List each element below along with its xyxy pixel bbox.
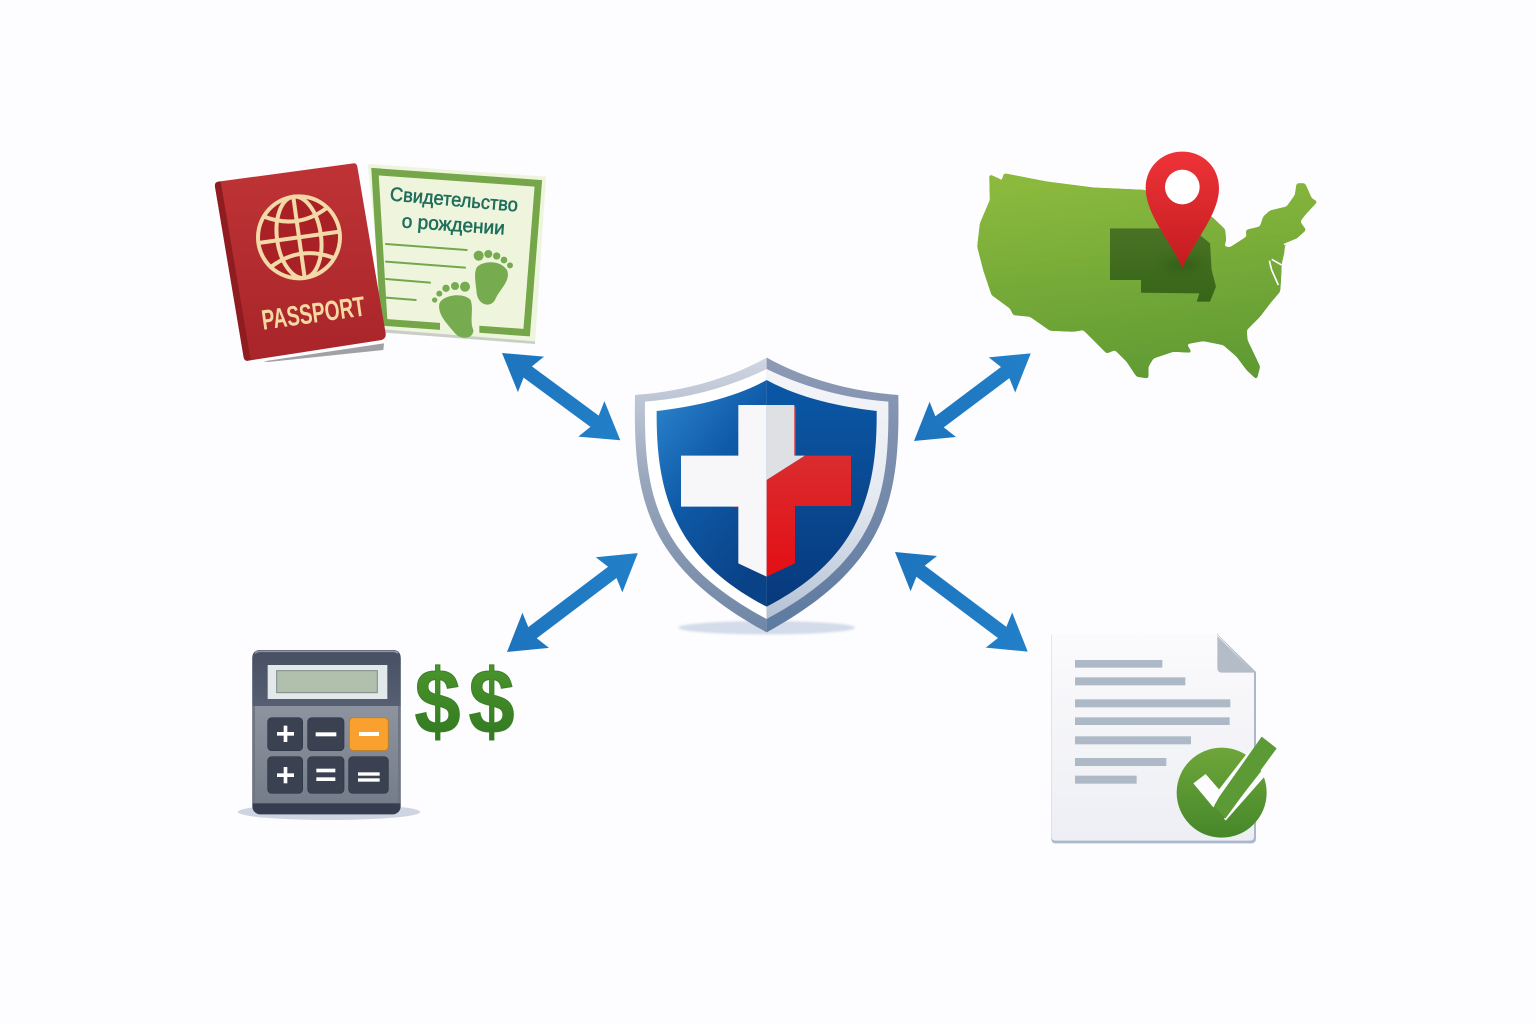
icon: right footprint: [474, 250, 513, 305]
icon: calculator: [238, 650, 420, 820]
certificate text lines: [386, 244, 467, 300]
icon: globe: [253, 191, 345, 284]
arrow: map to shield: [901, 336, 1044, 459]
medical cross: [681, 405, 851, 577]
calculator display: [268, 665, 387, 699]
icon: document with check mark: [1051, 634, 1277, 843]
arrow: passport to shield: [489, 335, 633, 458]
US map: [977, 173, 1317, 379]
page fold: [1217, 636, 1254, 673]
icon: passport: [215, 163, 386, 362]
icon: medical shield: [635, 358, 898, 634]
icon: US map with location pin: [977, 152, 1317, 379]
arrow: calculator to shield: [494, 536, 651, 670]
icon: left footprint: [432, 282, 473, 338]
certificate title: Свидетельство: [389, 184, 519, 217]
document text lines: [1075, 660, 1230, 784]
check badge: [1177, 737, 1277, 838]
location pin: [1146, 152, 1219, 268]
highlighted state: [1110, 228, 1216, 302]
icon: dollar signs: $$: [414, 650, 522, 753]
icon: birth certificate: [368, 164, 546, 344]
certificate subtitle: о рождении: [401, 211, 506, 240]
arrow: document to shield: [882, 534, 1041, 669]
passport label: PASSPORT: [260, 291, 367, 336]
calculator buttons: [268, 718, 388, 793]
